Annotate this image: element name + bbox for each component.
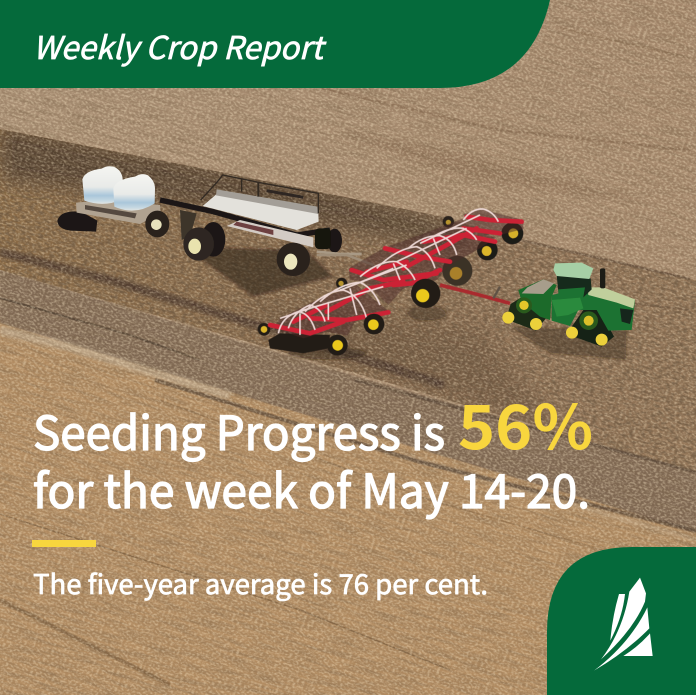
hitch bar xyxy=(440,285,510,303)
logo panel xyxy=(547,547,696,695)
header banner xyxy=(0,0,550,88)
headline line 2: for the week of May 14-20. xyxy=(33,453,590,522)
lower cultivated field xyxy=(0,320,696,695)
outer wheels behind frame xyxy=(443,216,454,227)
seeding percentage: 56% xyxy=(458,378,593,467)
track unit xyxy=(57,211,97,232)
pale strip beside the track xyxy=(0,330,230,396)
frame shadow mass xyxy=(273,209,523,338)
icon: wheat sail logo xyxy=(594,578,653,671)
green tractor xyxy=(502,263,635,360)
five-year average note: The five-year average is 76 per cent. xyxy=(33,563,488,602)
yellow divider xyxy=(32,540,96,547)
hitch line xyxy=(317,255,373,265)
front track xyxy=(567,310,614,347)
white tanks xyxy=(82,166,123,204)
red beams xyxy=(270,217,522,333)
dark fresh soil along top edge xyxy=(0,125,560,430)
yellow road wheels xyxy=(516,297,532,313)
cart wheels xyxy=(201,222,225,257)
white hoses xyxy=(278,209,498,335)
rail xyxy=(201,175,318,213)
body xyxy=(518,279,557,320)
cab xyxy=(557,275,592,297)
tines xyxy=(268,333,330,353)
tender wheel xyxy=(145,211,169,237)
red seeding drill xyxy=(258,209,523,360)
rear track xyxy=(506,295,547,331)
air cart body xyxy=(203,194,319,230)
air cart frame xyxy=(160,200,330,235)
air cart and tanks xyxy=(57,166,362,297)
tender frame xyxy=(76,200,161,224)
front wheels xyxy=(411,279,440,308)
seeded soil band xyxy=(0,129,696,472)
title: Weekly Crop Report xyxy=(33,23,327,69)
packed headland track band xyxy=(0,270,696,532)
headline line 1: Seeding Progress is xyxy=(33,395,445,464)
exhaust xyxy=(600,268,605,288)
